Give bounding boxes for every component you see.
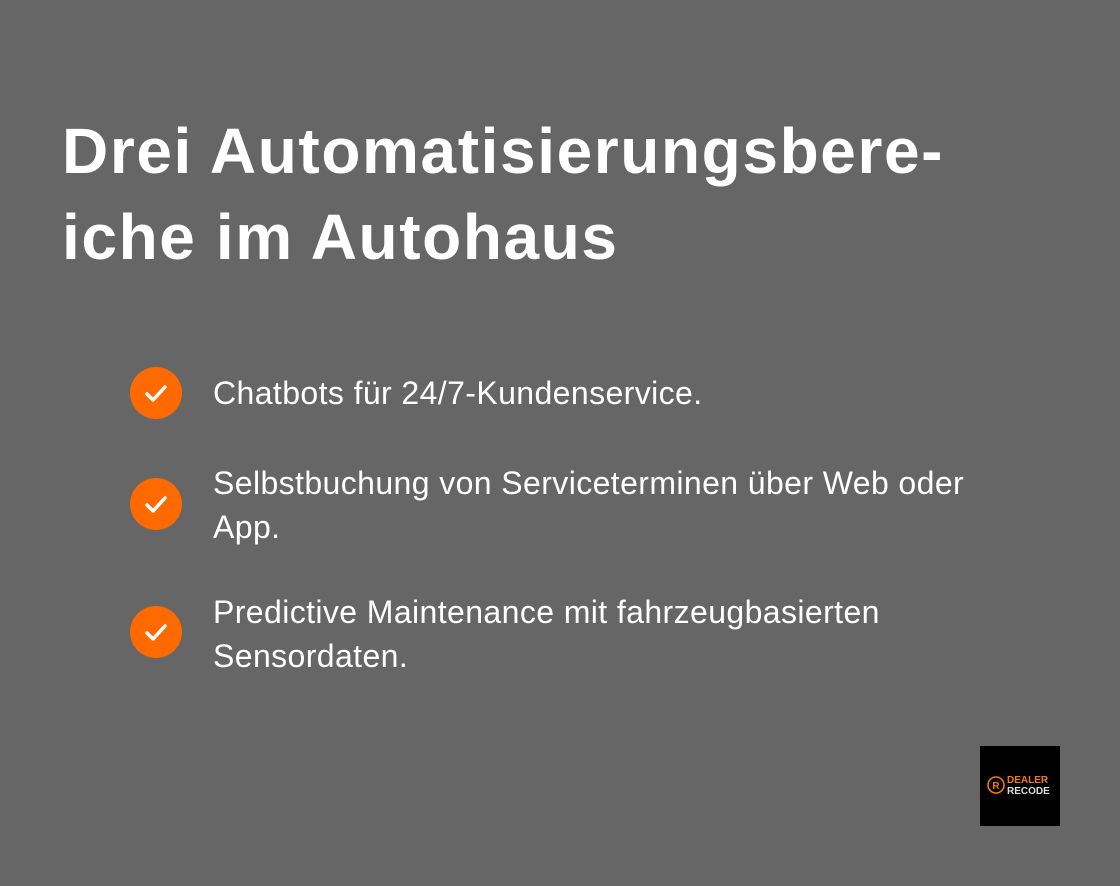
icon: check — [130, 606, 182, 658]
text 2: Selbstbuchung von Serviceterminen über Web oder — [213, 465, 964, 501]
logo: RECODE — [1007, 786, 1050, 797]
item 3 — [130, 594, 880, 674]
item 2 — [130, 465, 964, 545]
text 3 — [213, 594, 880, 674]
text 2 — [213, 465, 964, 545]
logo: R — [992, 781, 1000, 792]
title — [62, 115, 944, 273]
item 1 — [130, 367, 703, 419]
icon: check — [130, 367, 182, 419]
icon: check — [130, 478, 182, 530]
text 3: Sensordaten. — [213, 638, 408, 674]
title: Drei Automatisierungsbere- — [62, 115, 944, 187]
text 3: Predictive Maintenance mit fahrzeugbasierten — [213, 594, 880, 630]
text 2: App. — [213, 509, 280, 545]
title: iche im Autohaus — [62, 201, 619, 273]
logo: DEALER — [1007, 775, 1049, 786]
logo — [980, 746, 1060, 826]
text 1: Chatbots für 24/7-Kundenservice. — [213, 375, 703, 411]
